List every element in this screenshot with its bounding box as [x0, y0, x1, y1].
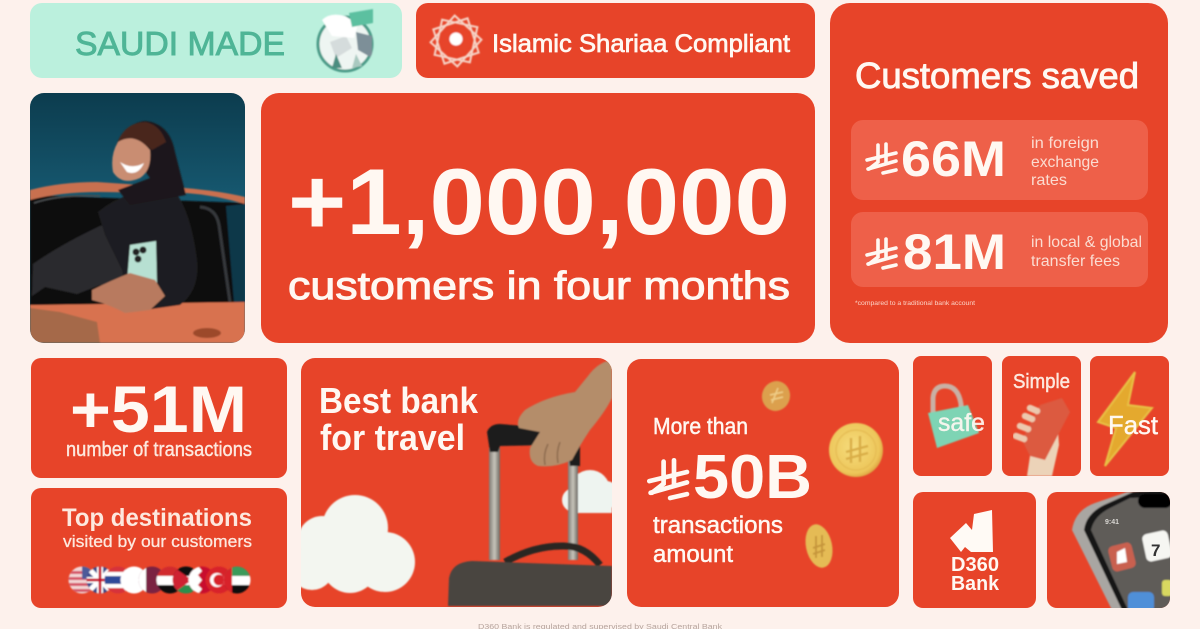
label: number of transactions: number of transactions	[66, 439, 252, 461]
value: 66M: 66M	[901, 131, 1006, 187]
flag: Jordan	[172, 566, 194, 594]
icon: left cloud	[290, 495, 415, 593]
hand	[92, 273, 165, 313]
icon: luggage poles	[489, 448, 578, 560]
flag: white green	[119, 566, 144, 594]
panel: fast	[1090, 356, 1169, 476]
heading: best bank for travel: for travel	[320, 417, 465, 458]
icon: Islamic star	[431, 16, 481, 66]
heading: top destinations: Top destinations	[62, 504, 252, 532]
label: safe: safe	[938, 409, 985, 437]
panel: customers saved	[830, 3, 1168, 343]
text: calendar date: 7	[1151, 541, 1160, 560]
flag: UK	[86, 566, 114, 594]
flag: Bahrain	[187, 566, 210, 594]
heading: best bank for travel: Best bank	[319, 380, 479, 421]
flag: Thailand	[104, 566, 126, 594]
icon: riyal sign	[867, 239, 896, 268]
icon: suitcase strap	[505, 546, 600, 565]
text: in foreign exchange rates: in foreign	[1031, 135, 1099, 152]
icon: riyal sign	[867, 144, 896, 173]
car interior	[30, 195, 245, 310]
icon: coins	[759, 378, 883, 570]
panel: transactions amount	[627, 359, 899, 607]
panel: transactions count	[31, 358, 287, 478]
icon: Saudi landmark badge	[318, 9, 373, 71]
text: transactions amount: transactions	[653, 512, 783, 539]
icon: lightning bolt	[1098, 372, 1152, 466]
photo: woman with phone in car	[30, 93, 245, 343]
text: in local and global transfer fees: in local & global	[1031, 234, 1142, 251]
flags row	[68, 566, 251, 595]
icon: hand	[518, 360, 612, 466]
panel: top destinations	[31, 488, 287, 608]
panel: one million customers	[261, 93, 815, 343]
text: in foreign exchange rates: rates	[1031, 172, 1067, 189]
heading: best bank for travel	[319, 380, 479, 458]
panel: safe	[913, 356, 992, 476]
stat: 66M foreign exchange	[851, 120, 1148, 200]
flag: Qatar	[138, 566, 162, 594]
icon: riyal sign	[649, 460, 687, 498]
icon: right cloud	[562, 470, 620, 513]
text: D360 Bank: D360	[951, 554, 999, 576]
stat: 81M transfer fees	[851, 212, 1148, 287]
panel: best bank for travel	[290, 358, 620, 607]
panel: Islamic Shariaa Compliant	[416, 3, 815, 78]
label: customers in four months: customers in four months	[288, 265, 790, 308]
panel: D360 Bank logo	[913, 492, 1036, 608]
value: +51M: +51M	[70, 372, 247, 446]
hair and scarf	[118, 121, 186, 205]
heading: Saudi Made: SAUDI MADE	[75, 25, 285, 62]
footnote: *compared to a traditional bank account	[855, 301, 975, 307]
label: fast: Fast	[1108, 410, 1159, 440]
flag: Turkey	[205, 566, 228, 594]
text: more than: More than	[653, 413, 748, 439]
text: transactions amount: amount	[653, 541, 733, 568]
text: phone clock: 9:41	[1105, 519, 1119, 526]
face	[112, 138, 150, 181]
illustration: phone with app icons	[1072, 490, 1173, 612]
icon: padlock	[928, 386, 979, 448]
phone	[127, 241, 157, 285]
text: in foreign exchange rates: exchange	[1031, 154, 1099, 171]
flag: USA	[68, 566, 92, 594]
icon: handle	[487, 424, 580, 466]
heading: Customers saved: Customers saved	[855, 55, 1139, 96]
panel: simple	[1002, 356, 1081, 476]
text: in foreign exchange rates	[1031, 135, 1099, 189]
value: +1,000,000: +1,000,000	[288, 149, 790, 254]
panel: Saudi Made	[30, 3, 402, 78]
text: D360 Bank	[951, 554, 1000, 595]
flag: UAE	[223, 566, 251, 595]
text: visited by our customers: visited by our customers	[63, 532, 252, 551]
icon: D360 logo	[950, 510, 993, 552]
icon: suitcase body	[448, 561, 612, 606]
text: Islamic Shariaa Compliant: Islamic Shariaa Compliant	[492, 30, 790, 58]
illustration: suitcase, hand and clouds	[290, 360, 620, 606]
value: 50B: 50B	[693, 443, 812, 512]
illustration: hand holding phone	[1016, 398, 1070, 476]
text: in local and global transfer fees	[1031, 234, 1142, 270]
panel: phone image	[1047, 490, 1173, 612]
text: in local and global transfer fees: transfer fees	[1031, 253, 1120, 270]
flag: Egypt	[155, 566, 180, 594]
sleeve and dress	[32, 222, 130, 296]
text: D360 Bank: Bank	[951, 573, 1000, 595]
value: 81M: 81M	[903, 224, 1006, 280]
label: simple: Simple	[1013, 371, 1070, 393]
text: transactions amount	[653, 512, 783, 568]
